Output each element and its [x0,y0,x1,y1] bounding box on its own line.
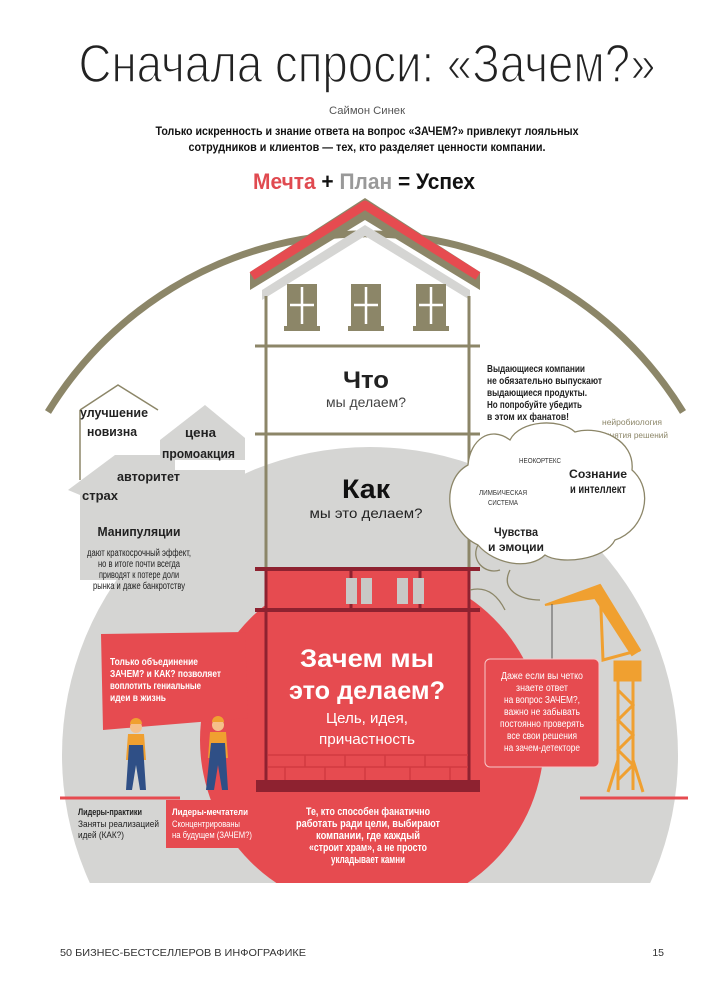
leaders dreamers [166,800,256,848]
temple text: работать ради цели, выбирают [296,818,441,830]
manipulation text: рынка и даже банкротству [93,580,185,592]
subtitle: Только искренность и знание ответа на вопрос «ЗАЧЕМ?» привлекут лояльных [156,124,579,138]
temple text: Те, кто способен фанатично [306,806,430,818]
red circle [200,599,542,883]
manipulation houses [68,385,245,580]
callout: detector: важно не забывать [504,706,580,718]
temple text: укладывает камни [331,854,405,866]
text: 15 [652,947,664,959]
temple text: «строит храм», а не просто [309,842,427,854]
callout: companies: Выдающиеся компании [487,364,585,375]
neuro label: нейробиология [602,417,662,427]
manipulation text: но в итоге почти всегда [98,559,180,570]
house: причастность [319,731,415,748]
callout: detector: все свои решения [507,731,577,742]
windows [284,284,449,331]
callout: detector: на вопрос ЗАЧЕМ?, [504,695,580,706]
leaders dreamers: Лидеры-мечтатели [172,807,248,817]
callout: union: воплотить гениальные [110,681,201,692]
neuro label [596,417,668,440]
brain cloud: и эмоции [488,540,544,554]
leaders dreamers: Сконцентрированы [172,819,240,829]
house: мы это делаем? [310,505,423,521]
leaders dreamers: на будущем (ЗАЧЕМ?) [172,830,252,840]
manipulation text: дают краткосрочный эффект, [87,547,191,559]
callout: companies: не обязательно выпускают [487,375,602,387]
manipulation text [87,524,191,592]
manipulation houses: новизна [87,424,138,439]
temple text [296,806,441,866]
что: Что [343,367,389,394]
brain cloud: ЛИМБИЧЕСКАЯ [479,488,527,497]
manipulation houses: страх [82,488,119,503]
house: мы делаем? [326,394,406,410]
manipulation houses: авторитет [117,469,180,484]
callout: detector: на зачем-детекторе [504,743,580,754]
callout: union: ЗАЧЕМ? и КАК? позволяет [110,669,221,680]
leaders practical: идей (КАК?) [78,830,124,840]
footer: 50 БИЗНЕС-БЕСТСЕЛЛЕРОВ В ИНФОГРАФИКЕ [60,947,306,959]
neuro label: принятия решений [596,430,668,440]
callout: union: Только объединение [110,656,198,668]
crane [545,585,643,792]
brain cloud: Чувства [494,525,538,539]
callout: detector [485,659,599,767]
manipulation houses: цена [185,425,217,440]
callout: companies [487,364,602,423]
callout: detector: Даже если вы четко [501,671,583,682]
callout: union [101,632,248,730]
subtitle [156,124,579,154]
brain cloud: Сознание [569,467,627,481]
gray circle background [62,447,678,883]
roof [250,198,480,290]
как: Как [342,474,391,504]
formula: Мечта + План = Успех [253,169,476,194]
author: Саймон Синек [329,105,405,117]
callout: detector: постоянно проверять [500,719,584,730]
brain cloud: СИСТЕМА [488,498,518,507]
house [250,198,480,792]
brain cloud [450,423,645,610]
callout: companies: Но попробуйте убедить [487,399,582,411]
ground lines [60,796,688,800]
house: Цель, идея, [326,710,408,727]
subtitle: сотрудников и клиентов — тех, кто разделяет ценности компании. [188,140,546,154]
leaders practical [78,807,159,840]
manipulation text: Манипуляции [98,524,181,539]
leaders practical: Лидеры-практики [78,807,142,817]
house: Зачем мы [300,645,434,673]
callout: union: идеи в жизнь [110,693,166,704]
manipulation houses: улучшение [80,405,148,420]
walls [266,296,469,790]
red floor [266,568,469,780]
house: это делаем? [289,677,445,705]
manipulation text: приводят к потере доли [99,570,179,581]
temple text: компании, где каждый [316,830,420,842]
workers [126,716,228,790]
brain cloud: НЕОКОРТЕКС [519,456,561,465]
manipulation houses: промоакция [162,446,235,461]
brain cloud: и интеллект [570,482,626,496]
big arch [48,234,683,412]
callout: companies: выдающиеся продукты. [487,388,587,399]
leaders practical: Заняты реализацией [78,819,159,829]
callout: companies: в этом их фанатов! [487,411,569,423]
callout: detector: знаете ответ [516,683,568,694]
